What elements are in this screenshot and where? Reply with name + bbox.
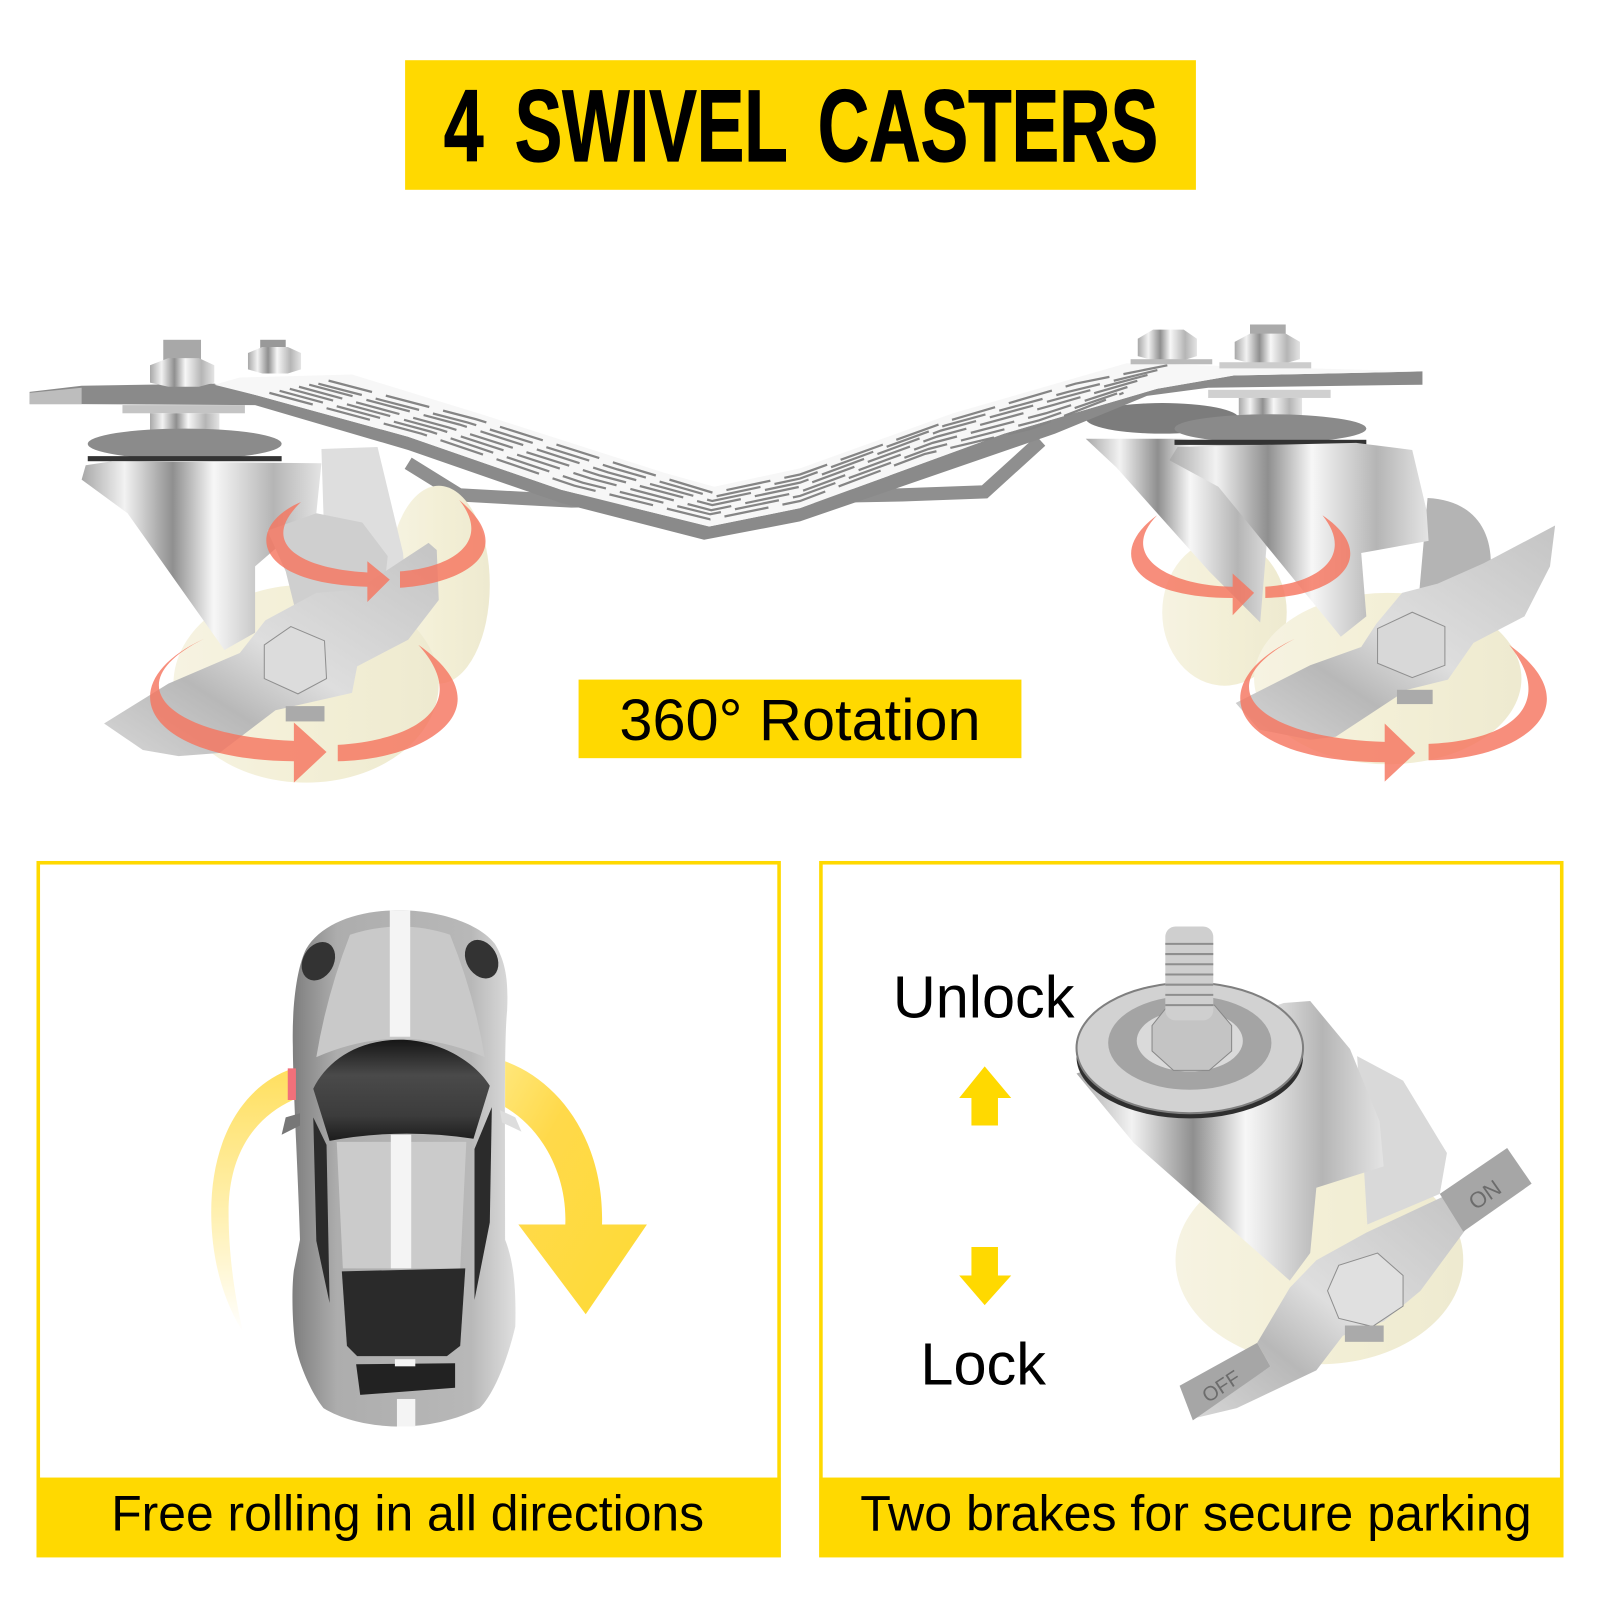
faint left curved arrow — [211, 1068, 293, 1332]
wheel — [1176, 1156, 1463, 1364]
caption band: Free rolling in all directions — [111, 1486, 704, 1542]
connecting rod — [408, 441, 1041, 501]
left upper arrow — [266, 500, 486, 602]
right rear wheel — [1162, 539, 1287, 686]
swivel race ring — [1174, 414, 1366, 445]
unlock label: Unlock — [893, 963, 1075, 1030]
up arrow — [959, 1066, 1011, 1126]
down arrow — [959, 1247, 1011, 1305]
race ring — [1077, 983, 1303, 1118]
swivel body — [82, 461, 321, 650]
caster with brake — [1077, 927, 1532, 1420]
axle bolt — [1378, 612, 1445, 704]
panel: free rolling — [37, 863, 781, 1557]
product photo: foot plate with rear wheels — [30, 324, 1422, 686]
left lower arrow — [150, 639, 458, 783]
lock label: Lock — [920, 1331, 1046, 1398]
360 rotation label — [579, 680, 1021, 758]
right curved yellow arrow — [505, 1061, 647, 1314]
360 rotation label: 360° Rotation — [619, 688, 981, 753]
off tab — [1180, 1343, 1270, 1420]
caption band — [37, 1478, 781, 1557]
brake cover — [267, 513, 388, 612]
on tab — [1440, 1148, 1532, 1232]
caption band: Two brakes for secure parking — [860, 1486, 1532, 1542]
threaded stud — [1165, 927, 1213, 1020]
on tab: ON — [1464, 1175, 1506, 1215]
axle bolt — [1328, 1253, 1403, 1342]
rear fork plate — [321, 447, 408, 622]
caption band — [819, 1478, 1563, 1557]
title banner: 4 SWIVEL CASTERS — [444, 69, 1158, 183]
right rear fork — [1086, 403, 1276, 622]
swivel race ring — [88, 429, 282, 461]
left top bolt and nuts — [150, 340, 301, 387]
brake lever — [1236, 526, 1555, 740]
title banner — [405, 60, 1196, 190]
right top bolts and nuts — [1131, 324, 1311, 368]
front wheel — [173, 585, 439, 783]
sports car top view — [282, 910, 521, 1427]
axle bolt — [264, 627, 327, 721]
panel: two brakes — [819, 863, 1563, 1557]
left front caster — [82, 405, 439, 783]
right front caster — [1169, 390, 1555, 764]
under-plate washer and nut — [122, 405, 245, 434]
hex nut — [1152, 1005, 1232, 1070]
under-plate washer and nut — [1208, 390, 1331, 416]
front wheel — [1254, 593, 1521, 764]
brake lever — [1194, 1194, 1469, 1418]
rotation arrows — [150, 500, 1547, 783]
off tab: OFF — [1199, 1367, 1245, 1408]
brake hood — [1357, 1056, 1447, 1224]
swivel body — [1169, 443, 1429, 637]
right upper arrow — [1131, 515, 1350, 615]
right lower arrow — [1240, 639, 1547, 782]
left rear wheel — [388, 486, 490, 684]
brake lever — [104, 543, 439, 756]
fork body — [1077, 1001, 1384, 1281]
foot plate — [30, 363, 1422, 540]
brake hood — [1418, 498, 1491, 602]
